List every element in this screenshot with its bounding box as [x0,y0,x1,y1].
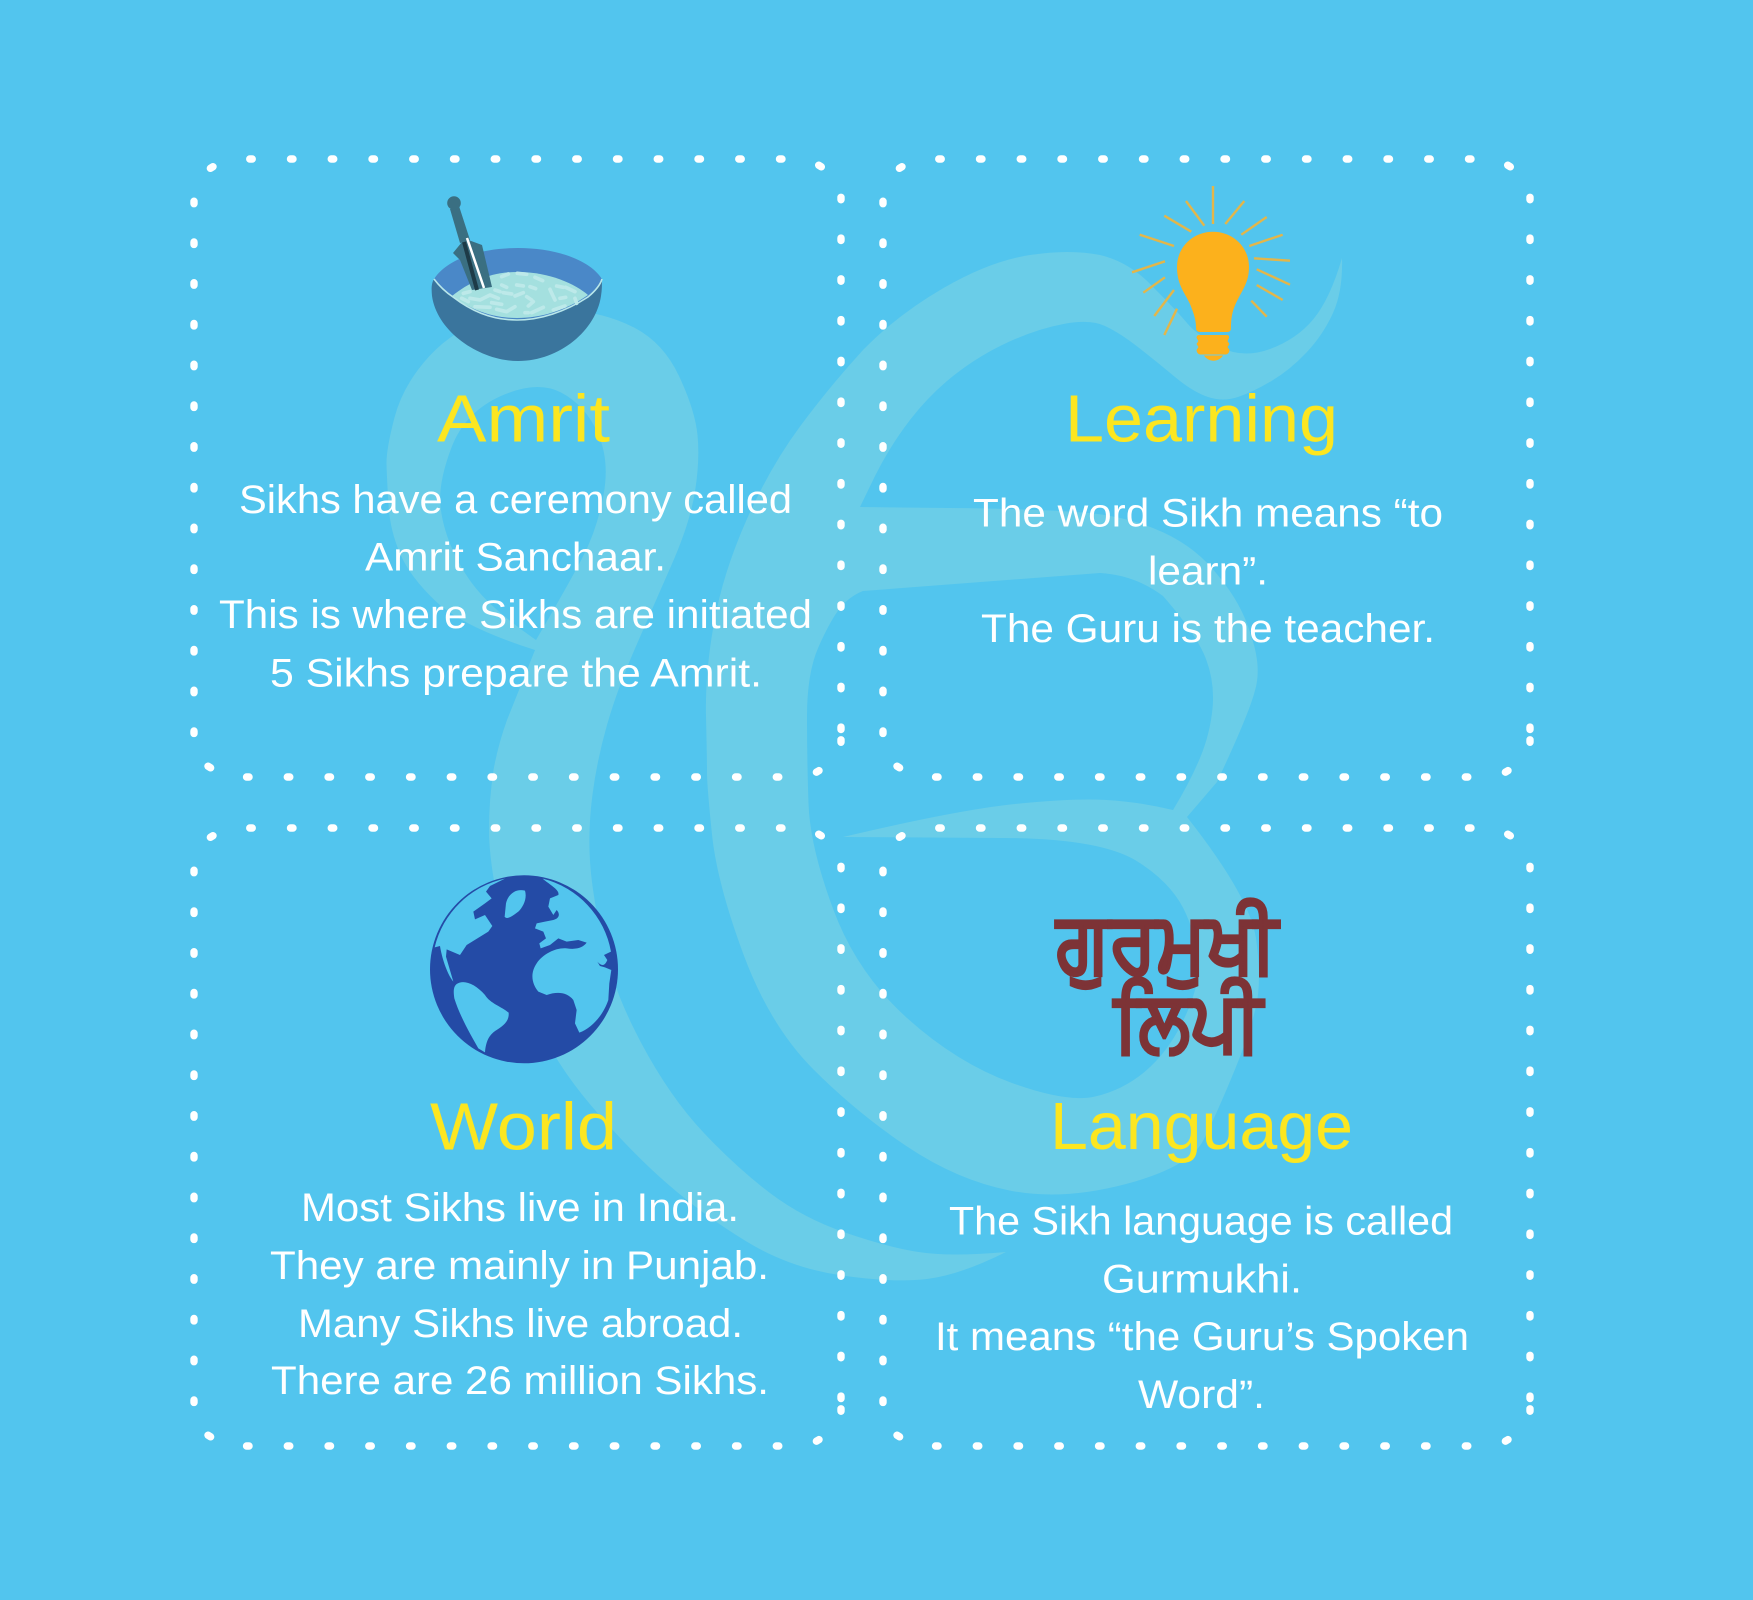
text block: Language: Word”. [1138,1373,1265,1417]
text block: Learning: The Guru is the teacher. [981,607,1435,651]
icon: globe [430,875,618,1063]
heading: World: World [430,1090,617,1164]
dotted border: Learning panel [883,159,1530,777]
heading: Learning: Learning [1065,382,1338,457]
panel: Language [883,828,1530,1446]
text block: Language [935,1200,1469,1417]
text block: World: Many Sikhs live abroad. [298,1302,743,1346]
watermark big curved stroke with upper tip [706,252,1342,1195]
panel: Learning [883,159,1530,777]
text block: Amrit: This is where Sikhs are initiated [219,593,812,637]
text block: Learning: The word Sikh means “to [973,492,1443,536]
icon: amrit bowl with khanda [432,196,602,361]
text block: World [270,1186,769,1403]
text block: Language: The Sikh language is called [949,1200,1453,1244]
panel: World [194,828,841,1446]
dotted border: Language panel [883,828,1530,1446]
text block: Language: It means “the Guru’s Spoken [935,1315,1469,1359]
text block: Amrit: Amrit Sanchaar. [365,536,666,580]
watermark loop and long tail stroke [386,310,1006,1280]
text block: World: They are mainly in Punjab. [270,1244,769,1288]
text block: Language: Gurmukhi. [1102,1258,1302,1302]
Gurmukhi script title: ਲਿਪੀ [1112,974,1265,1068]
dotted border: World panel [194,828,841,1446]
text block: World: There are 26 million Sikhs. [271,1359,769,1403]
Gurmukhi script title [1055,895,1281,1068]
icon: light bulb [1132,186,1290,361]
heading: Amrit: Amrit [437,382,610,457]
Gurmukhi script title: ਗੁਰਮੁਖੀ [1055,895,1281,990]
text block: Learning: learn”. [1148,549,1268,593]
text block: Amrit: 5 Sikhs prepare the Amrit. [270,652,762,696]
dotted border: Amrit panel [194,159,841,777]
text block: Learning [973,492,1443,651]
heading: Language: Language [1050,1089,1353,1164]
text block: Amrit [219,478,812,696]
watermark: Ek Onkar symbol [386,252,1342,1280]
panel: Amrit [194,159,841,777]
text block: World: Most Sikhs live in India. [301,1186,739,1230]
text block: Amrit: Sikhs have a ceremony called [239,478,792,522]
